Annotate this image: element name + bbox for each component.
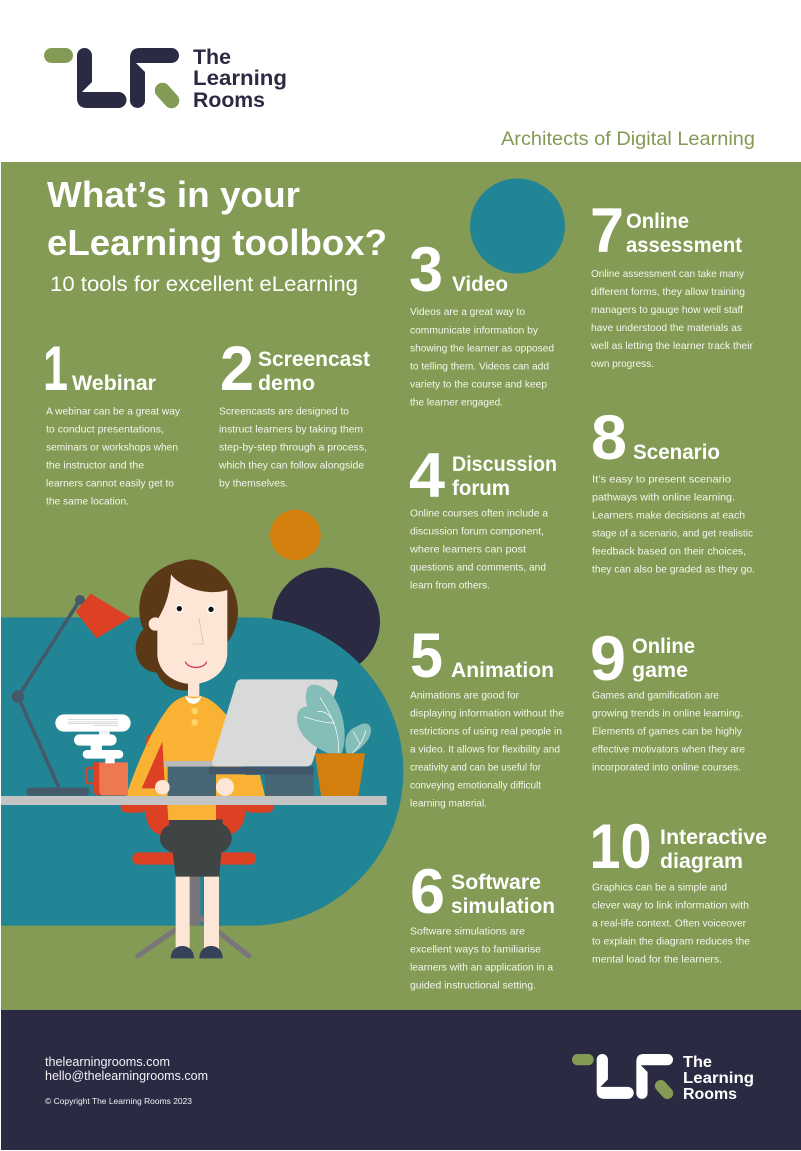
tagline: Architects of Digital Learning [501,128,755,150]
tool 9: online game: growing trends in online learning. [592,708,743,720]
tool 8: scenario: Learners make decisions at each [592,510,745,522]
title: What’s in your [47,174,300,215]
tool 8: scenario: they can also be graded as they go. [592,564,755,576]
tool 3: video: the learner engaged. [410,398,503,408]
tool 2: screencast demo: instruct learners by taking them [219,424,363,436]
tool 6: software simulation: Software simulations are [410,926,525,938]
tool 5: animation: creativity and can be useful for [410,762,541,774]
tool 1: webinar: learners cannot easily get to [46,478,174,490]
tool 7: online assessment: own progress. [591,359,654,370]
tool 3: video: showing the learner as opposed [410,344,554,354]
orange circle [270,510,321,560]
tool 5: animation: displaying information without the [410,708,564,720]
footer logo [572,1054,754,1103]
shoes [171,946,194,958]
tool 6: software simulation: guided instructional setting. [410,980,536,992]
neck [188,680,199,697]
tool 2: screencast demo: 2 [220,334,254,404]
tool 9: online game: effective motivators when they are [592,744,745,756]
tool 3: video: 3 [409,235,443,305]
tool 7: online assessment [590,196,754,370]
footer contact details [45,1054,208,1083]
tool 9: online game: Online [632,634,695,658]
eyes [175,605,183,613]
desk [1,796,387,805]
tool 8: scenario: It’s easy to present scenario [592,474,731,486]
copyright: © Copyright The Learning Rooms 2023 [45,1096,192,1106]
tool 6: software simulation [410,857,555,992]
tool 4: discussion forum: questions and comments, and [410,562,546,574]
tool 10: interactive diagram: mental load for the learners. [592,954,722,966]
hands [155,778,234,796]
smile [185,662,207,667]
footer logo: Learning [683,1070,754,1087]
header logo: The [193,46,231,69]
tool 1: webinar: the instructor and the [46,460,144,472]
tool 5: animation [410,621,564,810]
tool 10: interactive diagram: 10 [590,812,652,882]
header logo: Rooms [193,89,265,112]
tool 1: webinar: A webinar can be a great way [46,406,181,418]
title [47,174,387,263]
tool 6: software simulation: 6 [410,857,445,927]
tool 1: webinar: 1 [43,334,68,404]
tool 2: screencast demo: which they can follow alongside [218,460,364,472]
tool 2: screencast demo: by themselves. [219,478,288,490]
tool 3: video: Videos are a great way to [410,307,525,318]
tool 9: online game: Elements of games can be highly [592,726,743,738]
tool 8: scenario: feedback based on their choices, [592,546,746,558]
tool 5: animation: conveying emotionally difficult [410,780,541,792]
title: eLearning toolbox? [47,222,387,263]
tool 2: screencast demo: Screencast [258,347,370,371]
tool 9: online game: incorporated into online courses. [592,762,741,774]
tool 9: online game: game [632,658,688,682]
legs [176,873,190,949]
illustration: woman at desk [1,510,403,958]
tool 10: interactive diagram: Interactive [660,825,767,849]
face [157,574,227,684]
tool 2: screencast demo [218,334,370,490]
footer contact details: thelearningrooms.com [45,1054,170,1069]
tool 5: animation: learning material. [410,798,487,810]
header logo [44,46,287,112]
header logo: Learning [193,67,287,90]
tool 9: online game: 9 [590,624,626,694]
tool 10: interactive diagram: diagram [660,849,743,873]
tool 4: discussion forum: where learners can post [409,544,526,556]
tool 7: online assessment: 7 [590,196,624,266]
tool 9: online game: Games and gamification are [592,690,719,702]
tool 1: webinar: the same location. [46,496,129,508]
tool 4: discussion forum: Online courses often include a [410,508,548,520]
footer panel [1,1010,801,1150]
tool 2: screencast demo: demo [258,371,315,395]
tool 8: scenario: Scenario [633,440,720,464]
tool 2: screencast demo: Screencasts are designed to [219,406,349,418]
tool 7: online assessment: Online [626,209,689,233]
tool 7: online assessment: have understood the materials as [591,323,742,334]
tool 10: interactive diagram: Graphics can be a simple and [592,882,727,894]
tool 5: animation: Animation [451,658,554,682]
tool 10: interactive diagram: a real-life context. Often voiceover [592,918,747,930]
teal backdrop [1,617,403,926]
tool 1: webinar [43,334,181,508]
tool 3: video: variety to the course and keep [410,380,547,390]
footer logo: Rooms [683,1086,737,1103]
buttons [191,708,198,714]
mug [86,762,128,795]
collar [185,695,201,704]
decorative teal circle [470,178,565,274]
tool 3: video: communicate information by [410,326,539,336]
tool 6: software simulation: Software [451,870,541,894]
tool 4: discussion forum: discussion forum component, [410,526,544,538]
sweater [126,695,265,820]
tool 7: online assessment: well as letting the learner track their [590,341,754,352]
woman [126,559,265,958]
ear [149,617,162,631]
tool 9: online game [590,624,745,774]
skirt [160,819,232,877]
tool 4: discussion forum: forum [452,476,510,500]
tool 4: discussion forum: Discussion [452,452,557,476]
tool 4: discussion forum [409,441,557,592]
tool 8: scenario: stage of a scenario, and get realistic [592,528,753,540]
tool 7: online assessment: assessment [626,233,742,257]
tool 4: discussion forum: 4 [409,441,445,511]
navy circle [272,568,380,676]
laptop [164,679,338,796]
tool 6: software simulation: simulation [451,894,555,918]
tool 1: webinar: seminars or workshops when [46,442,178,454]
tool 5: animation: Animations are good for [410,690,520,702]
tool 5: animation: restrictions of using real people in [410,726,562,738]
tool 8: scenario [591,403,755,576]
tool 8: scenario: pathways with online learning. [592,492,735,504]
tool 2: screencast demo: step-by-step through a process, [219,442,367,454]
tool 1: webinar: to conduct presentations, [46,424,164,436]
tool 7: online assessment: different forms, they allow training [591,287,745,298]
tool 4: discussion forum: learn from others. [410,580,490,592]
footer contact details: hello@thelearningrooms.com [45,1068,208,1083]
tool 10: interactive diagram: to explain the diagram reduces the [592,936,750,948]
lamp [12,594,131,796]
green panel [1,162,801,1010]
tool 3: video [409,235,554,408]
nose [193,618,203,644]
tool 3: video: Video [452,272,508,296]
tool 10: interactive diagram [590,812,767,966]
tool 7: online assessment: Online assessment can take many [591,269,745,280]
tool 7: online assessment: managers to gauge how well staff [591,305,743,316]
steam [55,714,131,763]
tool 1: webinar: Webinar [72,371,157,395]
footer logo: The [683,1054,712,1071]
chair [121,727,273,956]
tool 6: software simulation: learners with an application in a [410,962,553,974]
tool 5: animation: 5 [410,621,443,691]
tool 3: video: to telling them. Videos can add [410,362,549,372]
tool 8: scenario: 8 [591,403,627,473]
tool 5: animation: a video. It allows for flexibility and [410,744,560,756]
plant [297,685,371,796]
tool 10: interactive diagram: clever way to link information with [592,900,749,912]
tool 6: software simulation: excellent ways to familiarise [410,944,541,956]
subtitle: 10 tools for excellent eLearning [50,273,358,296]
hair [136,559,238,691]
